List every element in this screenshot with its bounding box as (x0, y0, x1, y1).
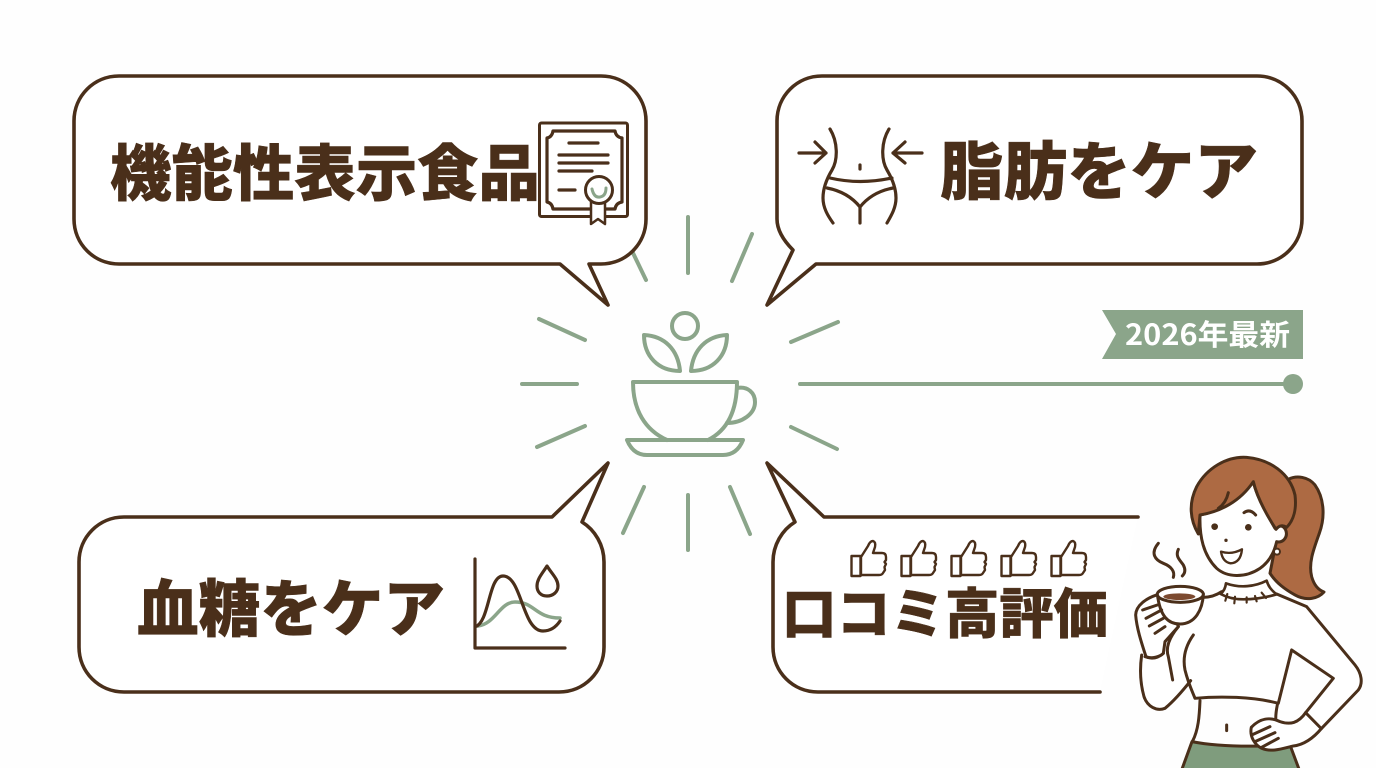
inner arm line (1167, 627, 1178, 680)
icon: waist with arrows (799, 129, 922, 223)
panel: fat care bubble (767, 76, 1302, 305)
sunburst rays around cup (522, 217, 838, 550)
neck ribs (1225, 593, 1266, 603)
right cuff and hand on hip (1251, 713, 1321, 750)
heading: high reviews: 口コミ高評価 (782, 585, 1108, 645)
panel: high reviews bubble (767, 463, 1138, 692)
heading: functional food: 機能性表示食品 (110, 140, 540, 208)
ribbon badge (1102, 310, 1303, 359)
illustration: woman drinking tea (1136, 457, 1361, 768)
turtleneck collar (1221, 581, 1277, 599)
facial features (1211, 511, 1280, 563)
badge label: 2026年最新 (1125, 312, 1290, 354)
tea cup (1143, 586, 1222, 633)
icon: glucose curve chart (475, 559, 565, 648)
icon: certificate (540, 123, 628, 224)
sweater outlines (1184, 594, 1361, 728)
sweater body fill (1140, 582, 1361, 728)
heading: blood sugar care: 血糖をケア (137, 576, 445, 645)
fringe strand (1218, 493, 1228, 508)
panel: 2026 latest badge and line (800, 310, 1303, 394)
panel: functional food claim bubble (74, 76, 646, 305)
icon: tea cup with leaves (627, 313, 755, 455)
panel: blood sugar care bubble (79, 463, 608, 692)
ponytail (1270, 477, 1324, 599)
icon: five thumbs up (852, 541, 1086, 576)
timeline line (800, 374, 1303, 394)
cup hand (1136, 595, 1178, 658)
waist lines (1193, 701, 1277, 741)
fingers (1252, 727, 1278, 747)
navel (1222, 725, 1231, 731)
hair (1191, 457, 1295, 534)
steam (1154, 543, 1185, 577)
left sleeve (1140, 653, 1191, 709)
face (1200, 482, 1286, 575)
heading: fat care: 脂肪をケア (940, 138, 1258, 208)
green trousers (1182, 742, 1299, 768)
